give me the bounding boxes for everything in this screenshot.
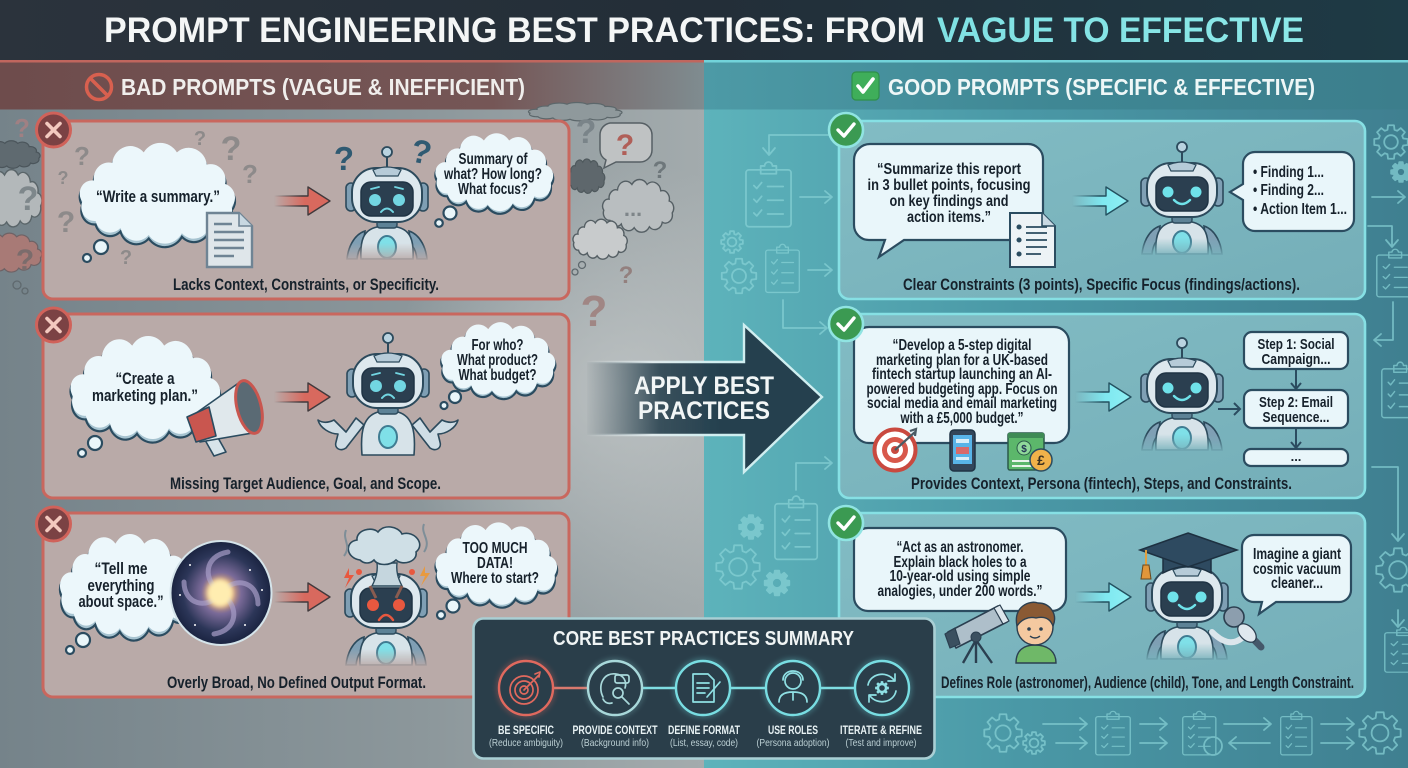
faded question marks <box>57 128 258 269</box>
speech bubble: marketing plan: social media and email marketing <box>867 395 1057 412</box>
background: left doodles of clouds and question marks: ? <box>653 157 667 184</box>
robot: graduate with microphone <box>1140 533 1261 659</box>
connectors <box>553 687 588 689</box>
faded question marks: ? <box>58 168 68 188</box>
icon: telescope <box>945 605 1009 663</box>
faded question marks: ? <box>57 206 75 239</box>
thought bubble: questions: What product? <box>457 352 538 369</box>
speech bubble: astronomer: “Act as an astronomer. <box>896 539 1024 556</box>
background: left doodles of clouds and question marks: ... <box>624 196 642 221</box>
robot: happy <box>1141 338 1223 450</box>
badge: check <box>829 307 863 341</box>
panel: core best practices summary <box>474 618 934 758</box>
thought bubble: questions: what? How long? <box>443 166 542 183</box>
badge: check <box>829 506 863 540</box>
step box 3: ... <box>1291 449 1301 464</box>
band: good prompts header <box>704 62 1408 110</box>
arrow: step 1 to 2 <box>1291 369 1301 389</box>
step: provide context: PROVIDE CONTEXT <box>572 725 658 737</box>
caption: Lacks Context, Constraints, or Specificity. <box>173 276 439 294</box>
background: right doodles of clipboards, gears and arrows <box>716 125 1408 755</box>
thought bubble: questions: Summary of <box>458 151 528 168</box>
thought bubble: questions: What focus? <box>458 181 528 198</box>
robot: confused: ? <box>334 140 354 177</box>
panel: bad prompt 2 <box>36 308 569 498</box>
step: be specific: BE SPECIFIC <box>498 725 554 737</box>
arrow <box>274 187 330 215</box>
speech bubble: summarize report: on key findings and <box>890 193 1008 210</box>
arrow: step 2 to 3 <box>1291 428 1301 448</box>
icon: prohibited <box>86 74 112 100</box>
arrow: robot to steps <box>1218 403 1240 415</box>
thought cloud: write a summary: “Write a summary.” <box>96 187 220 206</box>
icon: target <box>874 429 916 470</box>
background: left doodles of clouds and question marks: ? <box>576 113 596 151</box>
title bar <box>0 0 1408 62</box>
band: good prompts header: GOOD PROMPTS (SPECIFIC & EFFECTIVE) <box>888 74 1315 100</box>
arrow: apply best practices: PRACTICES <box>638 397 770 425</box>
thought bubble: questions <box>440 322 555 409</box>
thought bubble: too much data: Where to start? <box>451 570 539 587</box>
step: define format: DEFINE FORMAT <box>668 725 740 737</box>
arrow <box>1075 383 1131 411</box>
icon: bullet document <box>1010 213 1055 267</box>
background: left doodles of clouds and question marks: ? <box>616 129 634 162</box>
arrow: apply best practices <box>587 325 822 472</box>
speech bubble: vacuum analogy: cosmic vacuum <box>1253 561 1341 578</box>
panel: bad prompt 3 <box>36 507 569 697</box>
title: PROMPT ENGINEERING BEST PRACTICES: FROM <box>104 11 925 50</box>
speech bubble: summarize report <box>854 144 1043 257</box>
speech bubble: marketing plan: fintech startup launching an AI- <box>872 366 1052 383</box>
step box 1: Step 1: Social <box>1258 336 1334 353</box>
speech bubble: marketing plan: with a £5,000 budget.” <box>900 410 1024 427</box>
arrow: apply best practices: APPLY BEST <box>634 372 774 400</box>
speech bubble: astronomer: Explain black holes to a <box>894 554 1027 571</box>
step: use roles: (Persona adoption) <box>756 737 830 749</box>
background: left doodles of clouds and question marks: ? <box>581 287 607 336</box>
panel: good prompt 2 <box>829 307 1365 498</box>
arrow <box>1072 187 1128 215</box>
speech bubble: summarize report: action items.” <box>907 209 991 226</box>
band: bad prompts header: BAD PROMPTS (VAGUE & INEFFICIENT) <box>121 74 525 100</box>
thought cloud: marketing plan: “Create a <box>116 369 175 388</box>
icon: document <box>207 213 252 267</box>
background: left doodles of clouds and question marks: ? <box>14 113 30 143</box>
robot: head exploding <box>344 524 430 665</box>
step box 1 <box>1244 332 1348 369</box>
caption: Clear Constraints (3 points), Specific Focus (findings/actions). <box>903 276 1300 294</box>
arrow <box>1075 583 1131 611</box>
step: use roles <box>756 661 830 749</box>
background: left doodles of clouds and question marks <box>0 103 674 336</box>
thought bubble: questions <box>435 133 553 227</box>
speech bubble: marketing plan <box>854 327 1069 443</box>
summary heading: CORE BEST PRACTICES SUMMARY <box>553 627 854 650</box>
band: bad prompts header <box>0 62 704 110</box>
icon: money and pound coin <box>1008 433 1052 471</box>
robot: confused <box>335 140 431 260</box>
step box 1: Campaign... <box>1262 351 1330 368</box>
step: define format: (List, essay, code) <box>670 737 738 749</box>
faded question marks: ? <box>194 128 206 150</box>
background: left doodles of clouds and question marks: ? <box>16 244 34 277</box>
badge: cross <box>36 507 70 541</box>
icon: money and pound coin: $ <box>1021 444 1027 455</box>
badge: cross <box>36 113 70 147</box>
step: provide context: (Background info) <box>581 737 649 749</box>
caption: Provides Context, Persona (fintech), Steps, and Constraints. <box>911 475 1292 493</box>
output bubble: findings: • Finding 2... <box>1253 182 1324 199</box>
step: be specific: (Reduce ambiguity) <box>489 737 563 749</box>
speech bubble: astronomer <box>854 528 1066 611</box>
step: iterate and refine: (Test and improve) <box>846 737 916 749</box>
thought cloud: marketing plan <box>71 336 220 457</box>
output bubble: findings: • Action Item 1... <box>1253 201 1347 218</box>
output bubble: findings <box>1230 152 1354 231</box>
speech bubble: marketing plan: marketing plan for a UK-based <box>876 352 1048 369</box>
thought bubble: too much data: TOO MUCH <box>462 540 528 557</box>
image: spiral galaxy <box>170 541 272 645</box>
background: left side <box>0 0 704 768</box>
icon: green check box <box>852 72 879 100</box>
output bubble: findings: • Finding 1... <box>1253 164 1324 181</box>
icon: phone <box>950 430 975 471</box>
step: iterate and refine <box>840 661 922 749</box>
title: VAGUE TO EFFECTIVE <box>937 11 1304 50</box>
speech bubble: astronomer: 10-year-old using simple <box>890 568 1031 585</box>
robot: shrugging <box>318 333 458 455</box>
icon: megaphone <box>187 378 267 456</box>
robot: confused: ? <box>408 132 435 172</box>
faded question marks: ? <box>221 130 241 168</box>
step box 3 <box>1244 449 1348 466</box>
step: define format <box>668 661 740 749</box>
faded question marks: ? <box>74 141 90 171</box>
thought cloud: everything about space: everything <box>88 576 154 595</box>
thought cloud: write a summary <box>80 143 235 262</box>
panel: good prompt 1 <box>829 113 1365 299</box>
panel: good prompt 3 <box>829 506 1365 697</box>
thought bubble: too much data: DATA! <box>477 555 513 572</box>
robot: happy <box>1141 142 1223 254</box>
background: right side <box>704 0 1408 768</box>
faded question marks: ? <box>120 247 132 269</box>
speech bubble: vacuum analogy: cleaner... <box>1271 575 1323 592</box>
caption: Overly Broad, No Defined Output Format. <box>167 674 426 692</box>
arrow <box>274 583 330 611</box>
thought cloud: everything about space: about space.” <box>78 592 164 611</box>
speech bubble: marketing plan: powered budgeting app. Focus on <box>866 381 1058 398</box>
caption: Missing Target Audience, Goal, and Scope. <box>170 475 441 493</box>
speech bubble: marketing plan: “Develop a 5-step digital <box>892 337 1032 354</box>
thought cloud: everything about space <box>60 534 195 654</box>
background: left doodles of clouds and question marks: ? <box>619 262 633 289</box>
icon: child <box>1016 602 1056 663</box>
step: be specific <box>489 661 563 749</box>
thought bubble: questions: For who? <box>472 337 524 354</box>
step: iterate and refine: ITERATE & REFINE <box>840 725 922 737</box>
speech bubble: vacuum analogy: Imagine a giant <box>1253 546 1341 563</box>
speech bubble: summarize report: “Summarize this report <box>877 161 1022 178</box>
background: left highlight <box>300 110 704 768</box>
thought bubble: too much data <box>435 522 557 619</box>
speech bubble: astronomer: analogies, under 200 words.” <box>878 583 1042 600</box>
speech bubble: vacuum analogy <box>1242 535 1351 614</box>
faded question marks: ? <box>242 159 258 189</box>
speech bubble: summarize report: in 3 bullet points, focusing <box>868 177 1030 194</box>
arrow <box>274 383 330 411</box>
step: provide context <box>572 661 658 749</box>
badge: cross <box>36 308 70 342</box>
thought bubble: questions: What budget? <box>458 367 536 384</box>
panel: bad prompt 1 <box>36 113 569 299</box>
step box 2: Sequence... <box>1262 409 1330 426</box>
badge: check <box>829 113 863 147</box>
background: left doodles of clouds and question marks: ? <box>18 180 38 218</box>
thought cloud: marketing plan: marketing plan.” <box>92 386 198 405</box>
icon: money and pound coin: £ <box>1037 452 1045 468</box>
step box 2: Step 2: Email <box>1259 394 1333 411</box>
step box 2 <box>1244 390 1348 428</box>
thought cloud: everything about space: “Tell me <box>94 559 148 578</box>
step: use roles: USE ROLES <box>768 725 818 737</box>
